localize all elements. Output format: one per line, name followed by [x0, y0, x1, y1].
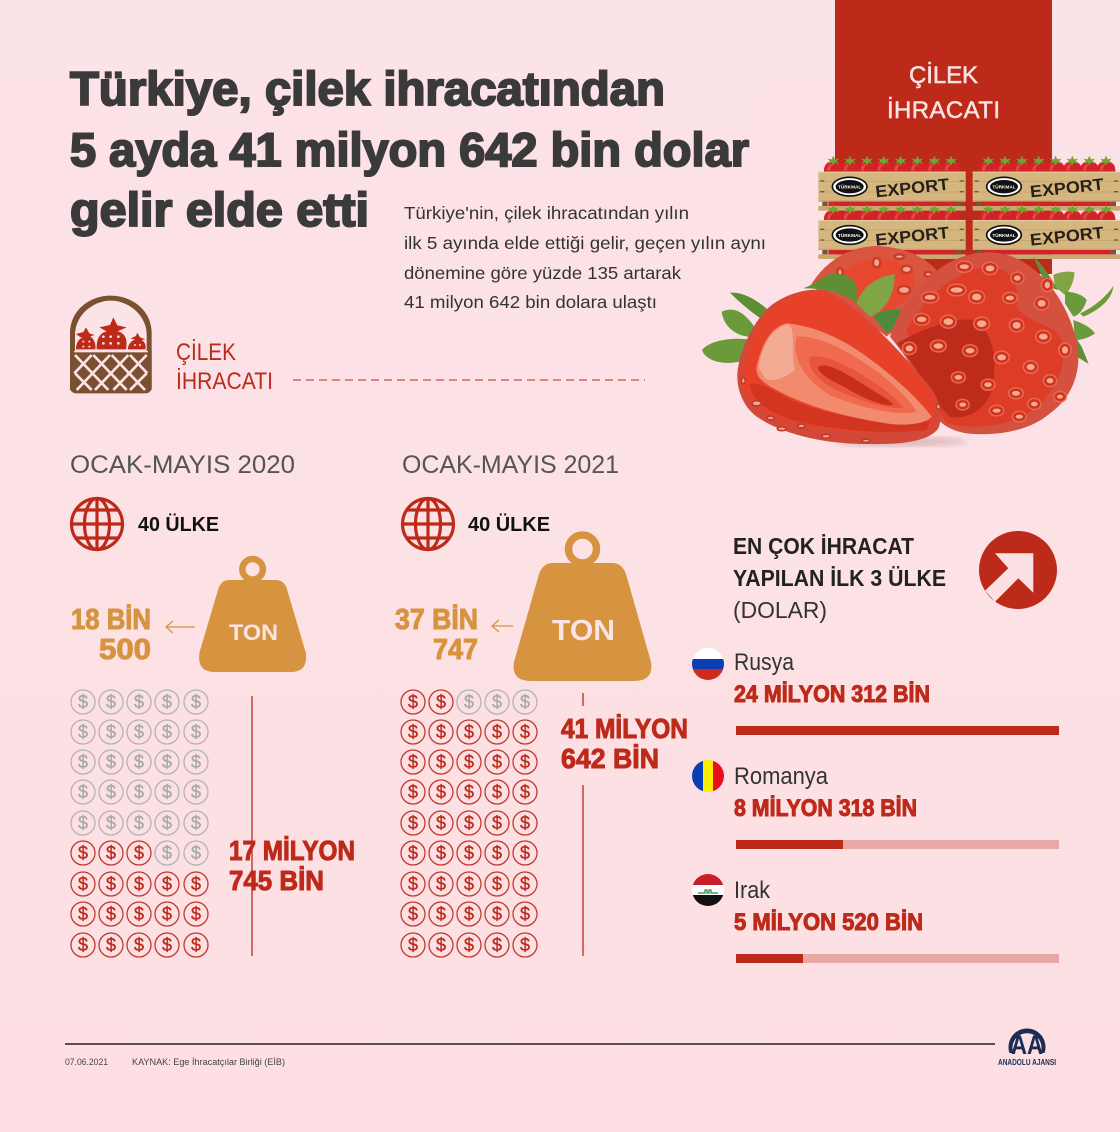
icon: flag of Romania — [692, 760, 724, 792]
icon: flag of Russia — [692, 648, 724, 680]
section label: Çilek ihracatı: ÇİLEK — [176, 339, 236, 366]
chart: dollar grid 2021: $ — [436, 782, 446, 802]
heading: top 3 countries: (DOLAR) — [733, 597, 827, 623]
chart: dollar grid 2020: $ — [162, 843, 172, 863]
heading: top 3 countries: EN ÇOK İHRACAT — [733, 533, 914, 559]
chart: dollar grid 2021: $ — [436, 813, 446, 833]
chart: dollar grid 2021: $ — [520, 782, 530, 802]
chart: dollar grid 2020: $ — [162, 692, 172, 712]
chart: dollar grid 2020: $ — [162, 752, 172, 772]
chart: dollar grid 2021: $ — [408, 722, 418, 742]
heading: top 3 countries — [733, 533, 946, 623]
chart: dollar grid 2021: $ — [520, 904, 530, 924]
illustration: export crates: TÜRKMAL — [838, 232, 861, 239]
chart: dollar grid 2020: $ — [191, 722, 201, 742]
value: 2021 dollars — [561, 713, 688, 774]
chart: dollar grid 2020: $ — [134, 813, 144, 833]
icon: weight 2021: TON — [552, 615, 615, 647]
chart: dollar grid 2020: $ — [191, 813, 201, 833]
heading: 2020: OCAK-MAYIS 2020 — [70, 451, 295, 479]
chart: dollar grid 2020: $ — [106, 813, 116, 833]
illustration: export crates — [818, 156, 1120, 259]
countries 2021: 40 ÜLKE — [468, 513, 550, 536]
panel: Romanya — [692, 760, 1059, 849]
title: 5 ayda 41 milyon 642 bin dolar — [70, 123, 749, 176]
arrow: 2020 tons — [166, 621, 195, 633]
chart: dollar grid 2021: $ — [436, 935, 446, 955]
chart: dollar grid 2020: $ — [78, 874, 88, 894]
chart: dollar grid 2021: $ — [492, 843, 502, 863]
chart: dollar grid 2020: $ — [106, 935, 116, 955]
heading: 2021: OCAK-MAYIS 2021 — [402, 451, 619, 479]
chart: dollar grid 2020: $ — [191, 904, 201, 924]
chart: dollar grid 2021: $ — [408, 874, 418, 894]
intro paragraph — [404, 203, 766, 312]
chart: dollar grid 2021: $ — [520, 874, 530, 894]
chart: dollar grid 2021: $ — [520, 843, 530, 863]
chart: dollar grid 2021: $ — [520, 935, 530, 955]
value: 2021 tons: 747 — [433, 634, 478, 666]
chart: dollar grid 2021: $ — [464, 843, 474, 863]
icon: globe 2021 — [402, 498, 454, 550]
chart: dollar grid 2020: $ — [106, 782, 116, 802]
title: Türkiye, çilek ihracatından — [70, 62, 665, 115]
chart: dollar grid 2020: $ — [162, 782, 172, 802]
chart: dollar grid 2021 — [401, 690, 537, 957]
chart: dollar grid 2020: $ — [134, 874, 144, 894]
illustration: strawberries — [702, 246, 1113, 446]
chart: dollar grid 2020: $ — [134, 722, 144, 742]
chart: dollar grid 2020: $ — [78, 692, 88, 712]
chart: dollar grid 2021: $ — [464, 782, 474, 802]
stem leaves — [702, 257, 1113, 364]
chart: dollar grid 2020: $ — [191, 692, 201, 712]
chart: dollar grid 2020: $ — [134, 692, 144, 712]
chart: dollar grid 2021: $ — [408, 904, 418, 924]
arrow: 2021 tons — [492, 620, 513, 632]
value: 2021 tons: 37 BİN — [395, 604, 478, 636]
icon: basket — [70, 296, 152, 393]
chart: dollar grid 2020: $ — [106, 874, 116, 894]
panel: Rusya: 24 MİLYON 312 BİN — [734, 681, 930, 708]
chart: dollar grid 2021: $ — [492, 935, 502, 955]
chart: dollar grid 2021: $ — [408, 935, 418, 955]
chart: dollar grid 2021: $ — [436, 843, 446, 863]
chart: dollar grid 2020: $ — [78, 904, 88, 924]
chart: dollar grid 2021: $ — [492, 782, 502, 802]
chart: dollar grid 2021: $ — [464, 874, 474, 894]
chart: dollar grid 2021: $ — [408, 843, 418, 863]
chart: dollar grid 2020: $ — [191, 752, 201, 772]
footer: date: 07.06.2021 — [65, 1057, 108, 1067]
value: 2021 dollars: 642 BİN — [561, 743, 659, 774]
chart: dollar grid 2020: $ — [78, 843, 88, 863]
value: 2020 dollars — [229, 835, 355, 896]
panel: Irak: 5 MİLYON 520 BİN — [734, 909, 923, 936]
chart: dollar grid 2021: $ — [492, 813, 502, 833]
chart: dollar grid 2021: $ — [464, 935, 474, 955]
chart: dollar grid 2021: $ — [492, 722, 502, 742]
logo: Anadolu Ajansı: ANADOLU AJANSI — [998, 1058, 1056, 1067]
chart: dollar grid 2020: $ — [106, 722, 116, 742]
chart: dollar grid 2020: $ — [134, 782, 144, 802]
chart: dollar grid 2020: $ — [78, 935, 88, 955]
chart: dollar grid 2021: $ — [492, 874, 502, 894]
chart: dollar grid 2020: $ — [191, 782, 201, 802]
intro paragraph: Türkiye'nin, çilek ihracatından yılın — [404, 203, 689, 223]
chart: dollar grid 2020: $ — [191, 843, 201, 863]
illustration: export crates: TÜRKMAL — [992, 184, 1016, 191]
icon: weight 2020: TON — [229, 620, 278, 645]
illustration: export crates: EXPORT — [874, 175, 950, 201]
icon: flag of Iraq — [692, 874, 724, 906]
chart: dollar grid 2021: $ — [492, 752, 502, 772]
chart: dollar grid 2020: $ — [191, 935, 201, 955]
panel: Rusya — [692, 648, 1059, 735]
logo: Anadolu Ajansı: AA — [1011, 1030, 1043, 1060]
chart: dollar grid 2020: $ — [162, 813, 172, 833]
title: gelir elde etti — [70, 183, 369, 236]
whole strawberry — [890, 252, 1078, 434]
logo: Anadolu Ajansı — [998, 1028, 1056, 1067]
panel: Rusya: Rusya — [734, 649, 795, 676]
chart: dollar grid 2020: $ — [134, 843, 144, 863]
illustration: export crates: EXPORT — [874, 223, 950, 250]
chart: dollar grid 2021: $ — [436, 904, 446, 924]
heading: top 3 countries: YAPILAN İLK 3 ÜLKE — [733, 565, 946, 591]
chart: dollar grid 2020: $ — [162, 874, 172, 894]
chart: dollar grid 2020: $ — [134, 935, 144, 955]
panel: red banner — [835, 0, 1052, 274]
value: 2020 dollars: 745 BİN — [229, 865, 324, 896]
panel: red banner: İHRACATI — [887, 97, 1000, 124]
icon: up arrow — [979, 531, 1057, 609]
chart: dollar grid 2020: $ — [78, 782, 88, 802]
illustration: export crates: TÜRKMAL — [838, 184, 861, 191]
chart: dollar grid 2020: $ — [162, 904, 172, 924]
illustration: export crates: EXPORT — [1029, 223, 1105, 250]
chart: dollar grid 2020: $ — [162, 722, 172, 742]
back strawberry — [810, 246, 939, 337]
section label: Çilek ihracatı — [176, 339, 273, 395]
chart: dollar grid 2020: $ — [134, 904, 144, 924]
chart: dollar grid 2021: $ — [436, 692, 446, 712]
chart: dollar grid 2020: $ — [106, 752, 116, 772]
value: 2021 tons — [395, 604, 478, 666]
value: 2020 tons — [71, 604, 151, 666]
footer: source: KAYNAK: Ege İhracatçılar Birliği (EİB) — [132, 1057, 285, 1067]
chart: dollar grid 2021: $ — [464, 722, 474, 742]
chart: dollar grid 2021: $ — [436, 752, 446, 772]
icon: weight 2020 — [199, 559, 306, 672]
intro paragraph: dönemine göre yüzde 135 artarak — [404, 263, 681, 283]
value: 2021 dollars: 41 MİLYON — [561, 713, 688, 744]
chart: dollar grid 2020: $ — [106, 904, 116, 924]
title — [70, 62, 749, 236]
chart: dollar grid 2020: $ — [134, 752, 144, 772]
cut strawberry — [737, 290, 941, 444]
illustration: export crates: TÜRKMAL — [992, 232, 1016, 239]
icon: globe 2020 — [72, 498, 122, 550]
panel: Irak — [692, 874, 1059, 963]
value: 2020 tons: 18 BİN — [71, 604, 151, 636]
chart: dollar grid 2021: $ — [520, 692, 530, 712]
value: 2020 dollars: 17 MİLYON — [229, 835, 355, 866]
chart: dollar grid 2021: $ — [408, 782, 418, 802]
value: 2020 tons: 500 — [99, 634, 151, 666]
chart: dollar grid 2020 — [71, 690, 208, 957]
chart: dollar grid 2020: $ — [78, 813, 88, 833]
chart: dollar grid 2021: $ — [408, 752, 418, 772]
chart: dollar grid 2021: $ — [464, 813, 474, 833]
chart: dollar grid 2020: $ — [78, 752, 88, 772]
icon: weight 2021 — [514, 535, 651, 681]
panel: Romanya: 8 MİLYON 318 BİN — [734, 795, 917, 822]
countries 2020: 40 ÜLKE — [138, 513, 219, 536]
chart: dollar grid 2021: $ — [464, 904, 474, 924]
illustration: export crates: EXPORT — [1029, 175, 1105, 201]
chart: dollar grid 2021: $ — [436, 722, 446, 742]
chart: dollar grid 2020: $ — [106, 692, 116, 712]
chart: dollar grid 2021: $ — [408, 692, 418, 712]
chart: dollar grid 2021: $ — [520, 813, 530, 833]
chart: dollar grid 2021: $ — [492, 904, 502, 924]
chart: dollar grid 2021: $ — [436, 874, 446, 894]
chart: dollar grid 2020: $ — [78, 722, 88, 742]
panel: Irak: Irak — [734, 877, 771, 904]
chart: dollar grid 2021: $ — [520, 752, 530, 772]
chart: dollar grid 2021: $ — [520, 722, 530, 742]
chart: dollar grid 2021: $ — [464, 692, 474, 712]
chart: dollar grid 2020: $ — [162, 935, 172, 955]
panel: Romanya: Romanya — [734, 763, 829, 790]
chart: dollar grid 2021: $ — [408, 813, 418, 833]
intro paragraph: ilk 5 ayında elde ettiği gelir, geçen yılın aynı — [404, 233, 766, 253]
intro paragraph: 41 milyon 642 bin dolara ulaştı — [404, 292, 657, 312]
panel: red banner: ÇİLEK — [909, 62, 978, 89]
chart: dollar grid 2021: $ — [464, 752, 474, 772]
chart: dollar grid 2020: $ — [191, 874, 201, 894]
chart: dollar grid 2021: $ — [492, 692, 502, 712]
section label: Çilek ihracatı: İHRACATI — [176, 368, 273, 395]
chart: dollar grid 2020: $ — [106, 843, 116, 863]
